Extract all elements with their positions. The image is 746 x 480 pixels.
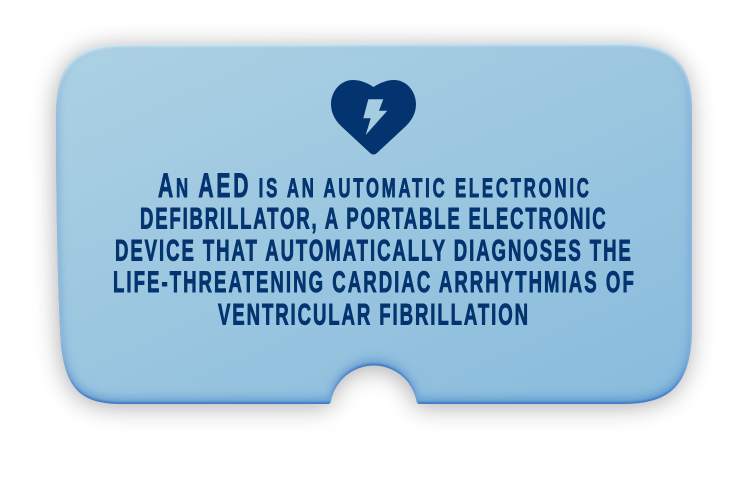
line 5: VENTRICULAR FIBRILLATION [218,298,528,332]
line 3: DEVICE THAT AUTOMATICALLY DIAGNOSES THE [115,234,631,268]
line 4: LIFE-THREATENING CARDIAC ARRHYTHMIAS OF [113,266,634,299]
text block: AED definition [113,166,634,332]
panel: rounded card with notch [56,43,692,404]
icon: heart with lightning bolt [331,80,416,154]
line 1: AN AED IS AN AUTOMATIC ELECTRONIC [158,166,589,204]
line 2: DEFIBRILLATOR, A PORTABLE ELECTRONIC [140,202,606,236]
